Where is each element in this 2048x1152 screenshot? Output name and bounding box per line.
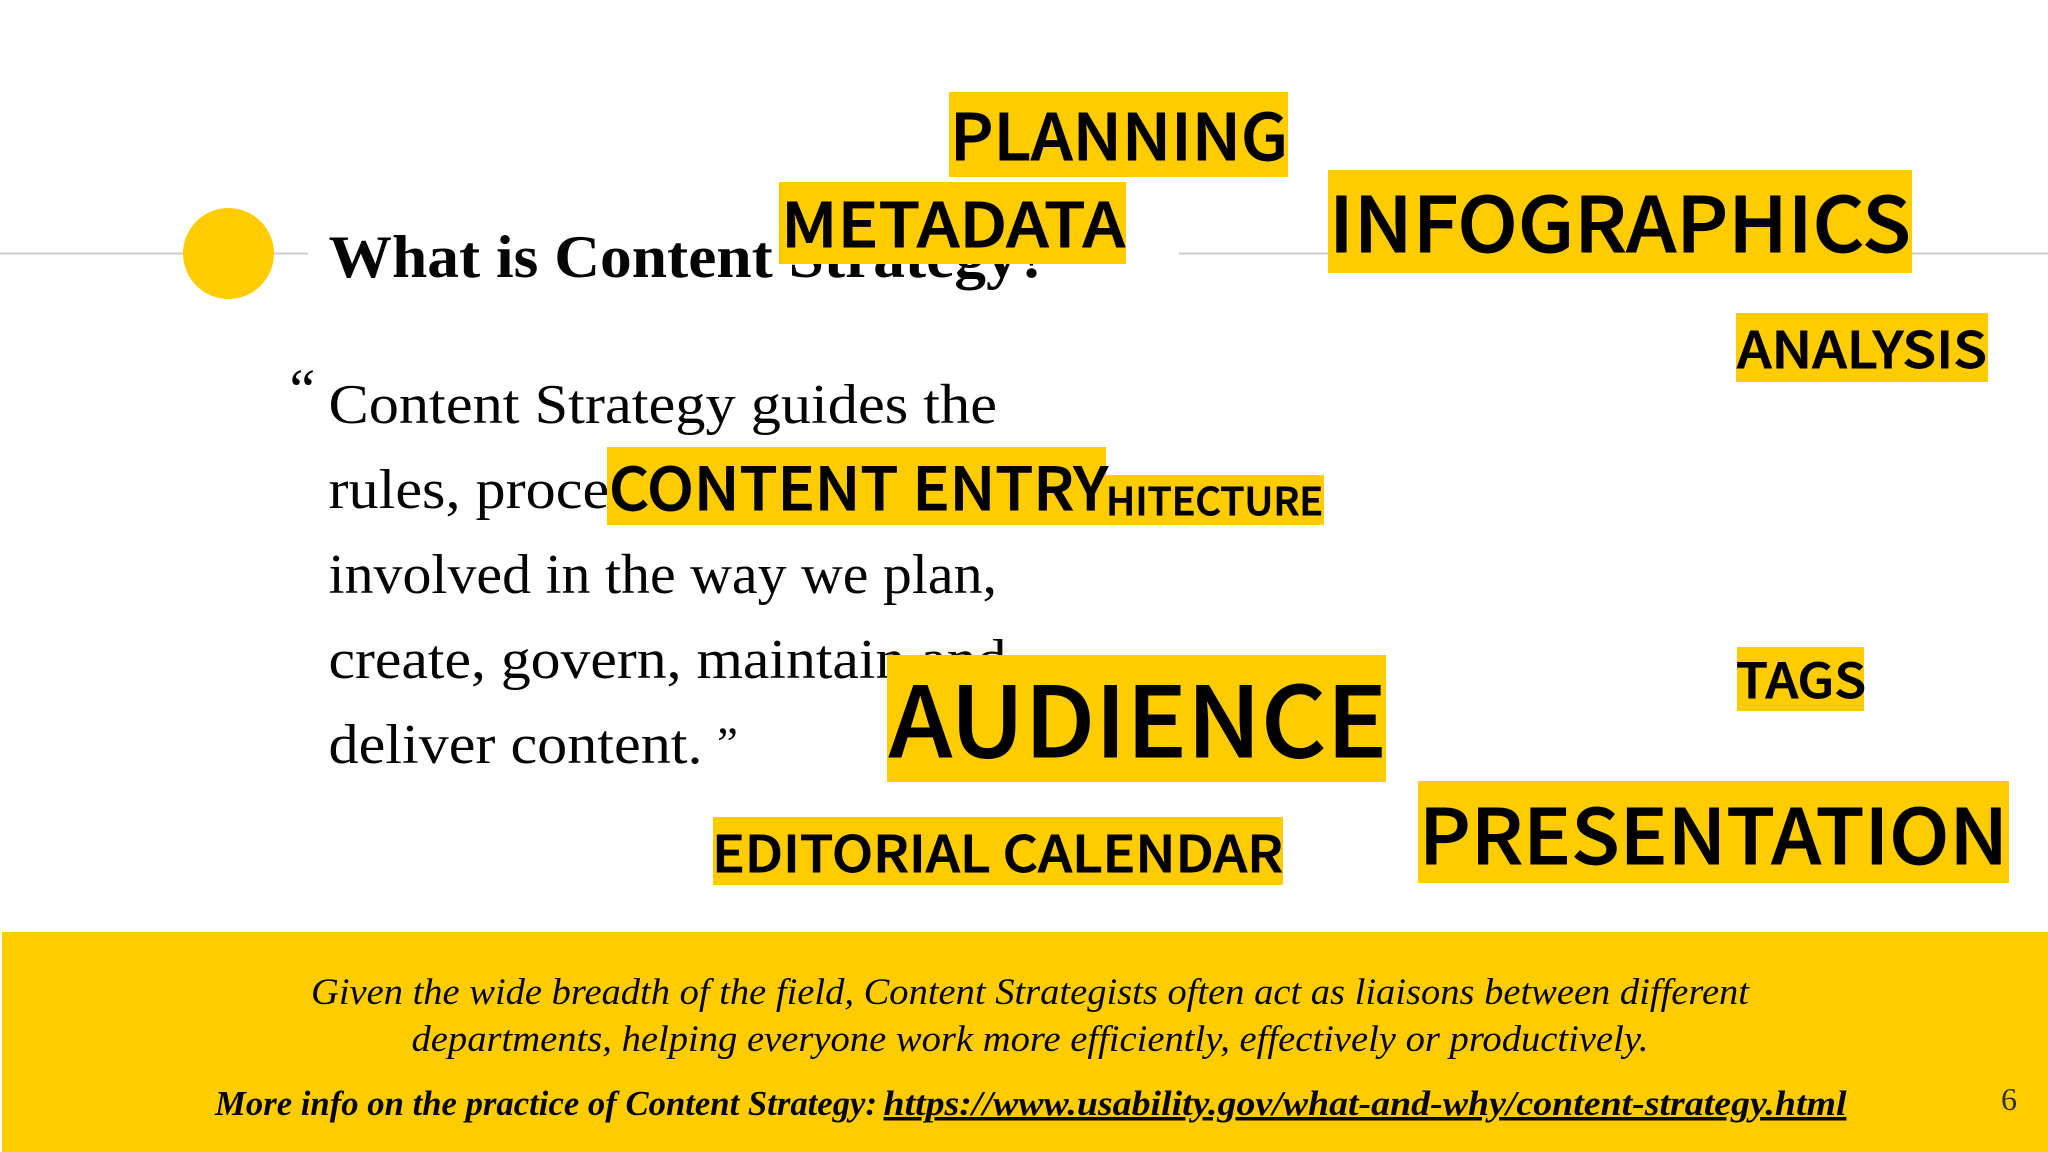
footer more info link — [214, 1084, 1847, 1123]
quote text block: ” — [717, 718, 738, 770]
tag: planning: PLANNING — [950, 87, 1288, 179]
tag: metadata: METADATA — [781, 176, 1125, 265]
tag: presentation: PRESENTATION — [1419, 776, 2008, 886]
quote text block — [328, 374, 1007, 776]
tag: content entry: CONTENT ENTRY — [609, 442, 1108, 527]
tag: infographics: INFOGRAPHICS — [1329, 164, 1911, 274]
footer more info link: https://www.usability.gov/what-and-why/content-strategy.html — [884, 1084, 1847, 1123]
footer description: Given the wide breadth of the field, Content Strategists often act as liaisons between different — [311, 972, 1751, 1013]
quote text block: rules, processes and people — [328, 459, 984, 521]
quote text block: create, govern, maintain and — [328, 629, 1007, 691]
footer description — [311, 972, 1751, 1060]
opening quotation mark: “ — [290, 357, 315, 422]
icon: yellow circle — [183, 208, 274, 299]
quote text block: deliver content. — [328, 714, 702, 776]
heading rule — [0, 252, 2048, 254]
title: What is Content Strategy? — [328, 224, 1050, 290]
page number: 6 — [2001, 1081, 2017, 1117]
quote text block: Content Strategy guides the — [328, 374, 997, 436]
tag: analysis: ANALYSIS — [1737, 311, 1987, 383]
footer description: departments, helping everyone work more efficiently, effectively or productively. — [412, 1019, 1648, 1060]
tag: editorial calendar: EDITORIAL CALENDAR — [712, 815, 1283, 887]
footer more info link: More info on the practice of Content Strategy: — [214, 1084, 877, 1123]
tag: audience: AUDIENCE — [889, 644, 1387, 785]
panel: footer band — [2, 932, 2048, 1152]
tag: architecture: ARCHITECTURE — [1030, 471, 1323, 526]
quote text block: involved in the way we plan, — [328, 544, 997, 606]
tag: tags: TAGS — [1736, 642, 1866, 712]
